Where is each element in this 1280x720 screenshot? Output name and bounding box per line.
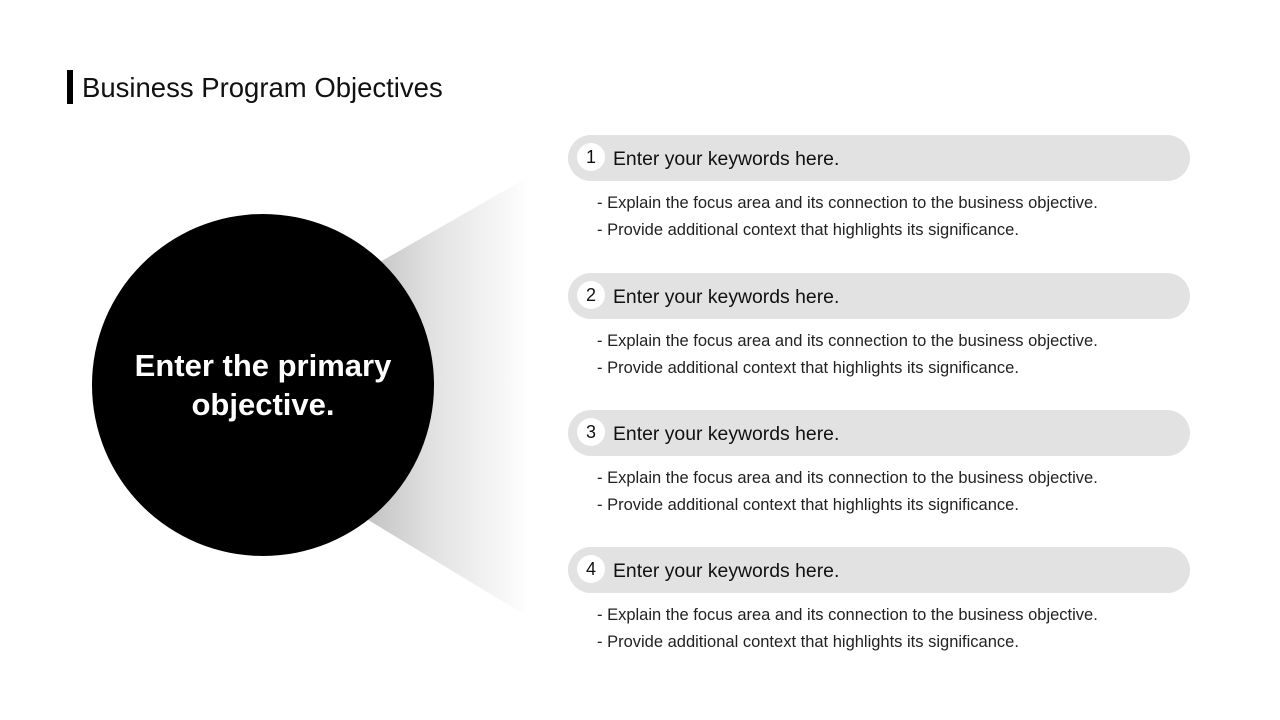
item 2: - Explain the focus area and its connection to the business objective. xyxy=(597,332,1098,350)
item 4: 4 xyxy=(586,559,596,579)
item 1: 1 xyxy=(586,147,596,167)
item 4: - Explain the focus area and its connection to the business objective. xyxy=(597,606,1098,624)
item 3: - Provide additional context that highlights its significance. xyxy=(597,496,1019,514)
item 4: Enter your keywords here. xyxy=(613,560,839,582)
main circle: Enter the primary xyxy=(135,348,391,383)
item 3 xyxy=(568,410,1190,514)
item 1: Enter your keywords here. xyxy=(613,148,839,170)
title: Business Program Objectives xyxy=(82,72,443,103)
item 4: - Provide additional context that highlights its significance. xyxy=(597,633,1019,651)
item 4 xyxy=(568,547,1190,651)
item 3: - Explain the focus area and its connection to the business objective. xyxy=(597,469,1098,487)
item 1: - Explain the focus area and its connection to the business objective. xyxy=(597,194,1098,212)
main circle xyxy=(92,214,434,556)
item 1 xyxy=(568,135,1190,239)
item 2 xyxy=(568,273,1190,377)
main circle: objective. xyxy=(191,387,334,422)
item 3: Enter your keywords here. xyxy=(613,423,839,445)
item 2: 2 xyxy=(586,285,596,305)
item 2: - Provide additional context that highlights its significance. xyxy=(597,359,1019,377)
item 2: Enter your keywords here. xyxy=(613,286,839,308)
item 3: 3 xyxy=(586,422,596,442)
item 1: - Provide additional context that highlights its significance. xyxy=(597,221,1019,239)
